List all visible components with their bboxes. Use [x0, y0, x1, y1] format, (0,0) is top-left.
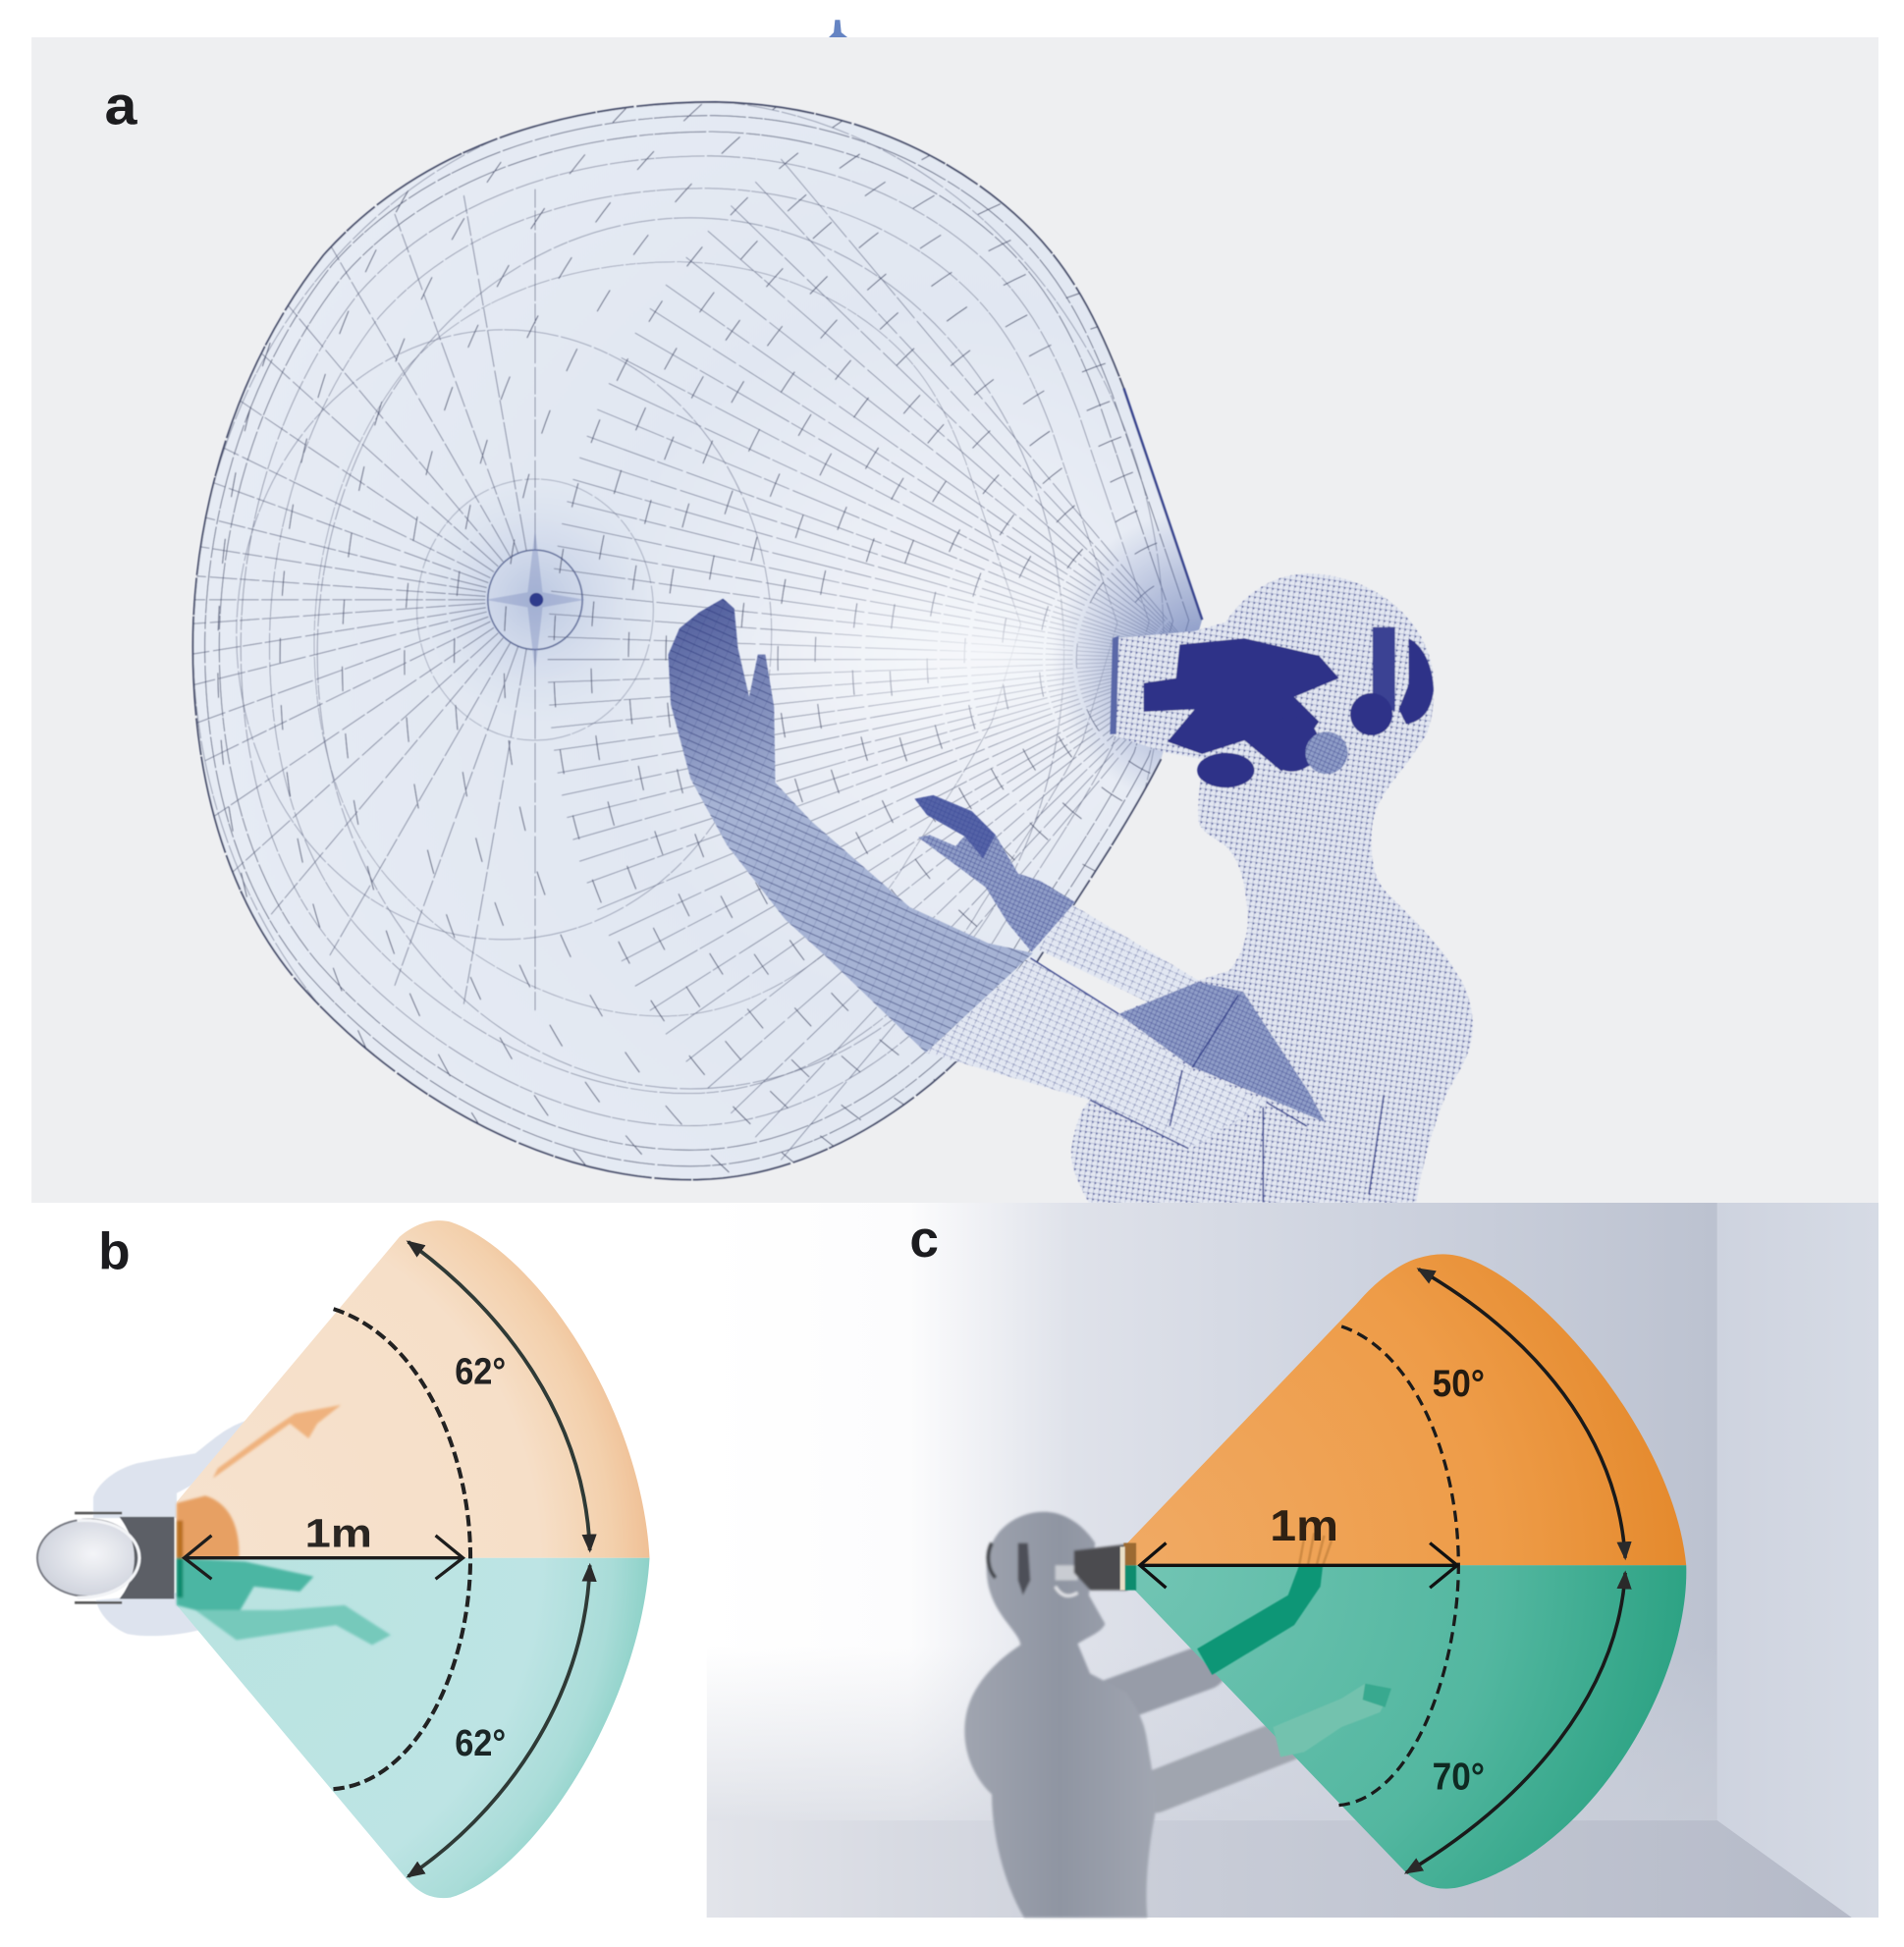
room background — [707, 1203, 1878, 1918]
dashed 1 m arc — [330, 1309, 470, 1789]
panel b: top view field of view — [37, 1220, 650, 1898]
second arm and hand — [914, 795, 1326, 1122]
icon: clipped blue mark at top edge — [829, 20, 847, 37]
label a: a — [104, 76, 137, 136]
panel c: side view field of view — [707, 1203, 1878, 1918]
headset — [1110, 627, 1434, 787]
arms seen through cone — [177, 1405, 391, 1645]
side-view user — [964, 1512, 1288, 1918]
arm and hands through cone — [1120, 1533, 1391, 1757]
angle label upper: 50° — [1433, 1362, 1485, 1405]
angle label lower: 70° — [1433, 1755, 1485, 1798]
green lower cone sector — [1127, 1565, 1686, 1889]
distance label: 1m — [1270, 1502, 1338, 1550]
label b: b — [98, 1223, 131, 1281]
raised arm outside sphere — [926, 958, 1267, 1149]
distance label: 1m — [304, 1510, 372, 1555]
panel a: wireframe vision sphere and VR user — [31, 37, 1878, 1203]
top-view user body — [37, 1421, 248, 1636]
1 m distance arrow — [185, 1536, 462, 1579]
outer arcs with arrows — [1406, 1270, 1625, 1872]
vision sphere mesh — [190, 100, 1204, 1182]
outer arcs with arrows — [408, 1242, 590, 1876]
orange upper cone sector — [177, 1220, 650, 1558]
VR user torso and head point cloud — [669, 573, 1473, 1203]
angle label upper: 62° — [455, 1351, 506, 1392]
angle label lower: 62° — [455, 1723, 506, 1764]
teal lower cone sector — [177, 1558, 650, 1898]
label c: c — [909, 1211, 939, 1269]
orange upper cone sector — [1127, 1254, 1686, 1565]
1 m distance arrow — [1140, 1542, 1457, 1588]
raised arm and hand inside sphere — [669, 599, 1033, 1053]
dashed 1 m arc — [1334, 1326, 1458, 1806]
